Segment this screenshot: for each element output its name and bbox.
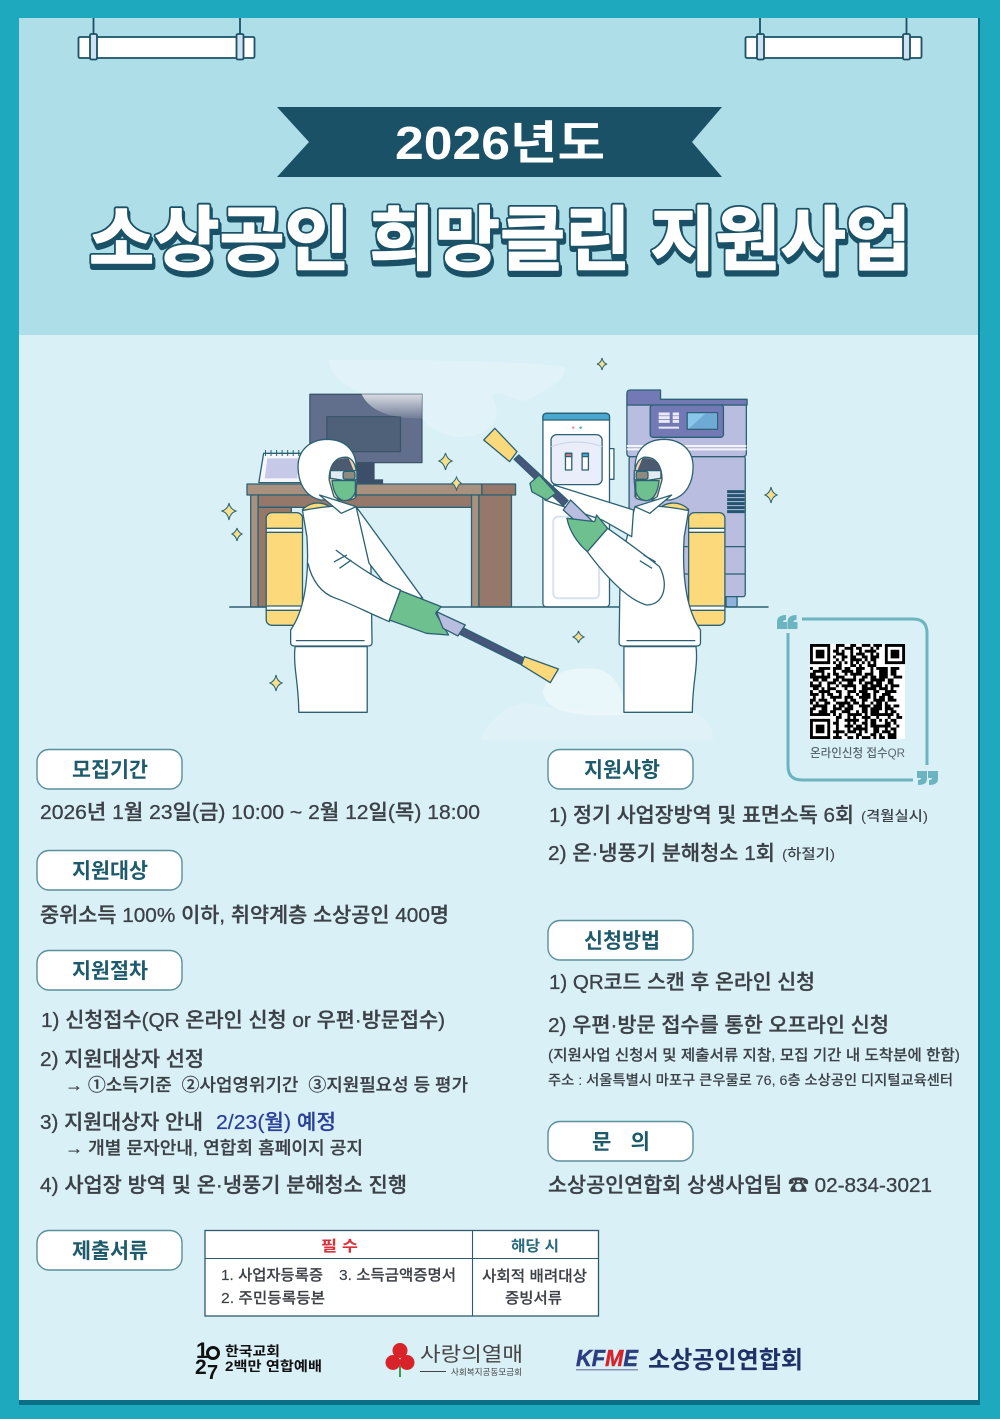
title: 소상공인 희망클린 지원사업 [90, 205, 912, 283]
label: 지원사항 [584, 759, 660, 782]
header panel [19, 18, 978, 335]
section: contact [548, 1122, 932, 1197]
mist clouds [328, 360, 713, 740]
water cooler [543, 413, 614, 607]
support items text: (하절기) [782, 846, 835, 862]
arm [308, 550, 400, 622]
QR code [810, 644, 905, 739]
lower arm [587, 528, 664, 605]
quote mark: open [777, 615, 798, 629]
documents table: 2. 주민등록등본 [221, 1290, 325, 1307]
procedure steps: 3) 지원대상자 안내 [40, 1111, 203, 1134]
documents table: 해당 시 [511, 1238, 559, 1255]
worker: right [484, 428, 725, 712]
target text: 중위소득 100% 이하, 취약계층 소상공인 400명 [40, 904, 449, 927]
QR card [777, 615, 938, 785]
application text: 주소 : 서울특별시 마포구 큰우물로 76, 6층 소상공인 디지털교육센터 [548, 1072, 953, 1088]
sprayer handle [436, 612, 465, 636]
raised arm [545, 485, 634, 537]
suit body [291, 506, 372, 646]
lower glove [567, 515, 608, 552]
support items text: 1) 정기 사업장방역 및 표면소독 6회 [549, 804, 854, 827]
backpack tank [266, 503, 336, 625]
documents table: 필 수 [321, 1238, 358, 1255]
procedure steps: 4) 사업장 방역 및 온·냉풍기 분해청소 진행 [40, 1174, 407, 1197]
sprayer pole [459, 627, 558, 683]
hanger: left [78, 18, 254, 60]
label: 신청방법 [584, 930, 660, 953]
logo: KFME 소상공인연합회 [576, 1345, 803, 1374]
ribbon: year: 2026년도 [395, 117, 605, 169]
application text [548, 971, 960, 1088]
documents table: 3. 소득금액증명서 [339, 1267, 456, 1284]
documents table: 증빙서류 [505, 1290, 562, 1307]
support items text: 2) 온·냉풍기 분해청소 1회 [548, 842, 775, 865]
section: recruitment period [37, 750, 480, 824]
quote mark: close [917, 771, 938, 785]
label [37, 1230, 182, 1270]
desk [247, 484, 516, 607]
label: 지원절차 [72, 960, 148, 983]
support items text: (격월실시) [861, 808, 928, 824]
support items text [548, 804, 928, 865]
upper glove [530, 475, 556, 500]
section: application method [548, 920, 960, 1088]
logo: 1027: 7 [207, 1362, 218, 1384]
procedure steps: 2) 지원대상자 선정 [40, 1048, 204, 1071]
label [548, 920, 693, 960]
glove [389, 591, 449, 635]
section: support items [548, 750, 928, 865]
calendar [259, 450, 302, 483]
documents table: 사회적 배려대상 [482, 1268, 587, 1285]
monitor [310, 394, 422, 484]
copier [627, 390, 747, 607]
hood and face [298, 439, 357, 513]
mirrored body [619, 439, 725, 712]
label [37, 950, 182, 990]
label: 문 의 [592, 1131, 650, 1154]
application text: 2) 우편·방문 접수를 통한 오프라인 신청 [548, 1014, 889, 1037]
section: documents [37, 1230, 598, 1316]
label [548, 1122, 693, 1161]
contact text: 소상공인연합회 상생사업팀 ☎ 02-834-3021 [548, 1174, 932, 1197]
procedure steps: 2/23(월) 예정 [216, 1111, 336, 1134]
ribbon: year [277, 107, 722, 177]
label [548, 750, 693, 789]
logo: 1027: 2백만 연합예배 [225, 1359, 322, 1374]
application text: (지원사업 신청서 및 제출서류 지참, 모집 기간 내 도착분에 한함) [548, 1047, 960, 1064]
QR frame [788, 619, 927, 780]
label [37, 750, 182, 789]
logo: KFME 소상공인연합회: 소상공인연합회 [648, 1347, 803, 1374]
procedure steps [40, 1009, 468, 1197]
logo: 사랑의열매: 사회복지공동모금회 [451, 1367, 522, 1377]
logo: 1027 [195, 1338, 322, 1384]
procedure steps: → ①소득기준 ②사업영위기간 ③지원필요성 등 평가 [65, 1075, 468, 1095]
documents table: 1. 사업자등록증 [221, 1267, 323, 1284]
title: 소상공인 희망클린 지원사업 [89, 201, 911, 279]
floor line [229, 606, 769, 608]
procedure steps: 1) 신청접수(QR 온라인 신청 or 우편·방문접수) [41, 1009, 445, 1032]
application text: 1) QR코드 스캔 후 온라인 신청 [549, 971, 815, 994]
sprayer pole raised [484, 428, 568, 506]
logo: 1027: 1 [196, 1338, 208, 1363]
procedure steps: → 개별 문자안내, 연합회 홈페이지 공지 [65, 1138, 363, 1158]
section: target [37, 850, 449, 927]
logo: 사랑의열매: 사랑의열매 [420, 1343, 523, 1366]
label [37, 850, 182, 890]
logo: 1027: 2 [195, 1356, 207, 1379]
documents table [205, 1230, 598, 1316]
logo: 1027: 한국교회 [225, 1344, 280, 1359]
sprayer handle raised [563, 500, 593, 522]
section: procedure [37, 950, 468, 1197]
worker: left [266, 439, 558, 712]
dates: 2026년 1월 23일(금) 10:00 ~ 2월 12일(목) 18:00 [40, 801, 480, 824]
label: 모집기간 [72, 759, 148, 782]
QR caption: 온라인신청 접수QR [810, 746, 905, 760]
label: 지원대상 [72, 860, 148, 883]
legs [295, 647, 367, 712]
logo: KFME 소상공인연합회: KFME [576, 1345, 639, 1371]
illustration: two workers disinfecting an office [229, 360, 769, 740]
title: 소상공인 희망클린 지원사업 [89, 201, 911, 279]
logo: 사랑의열매 [386, 1343, 523, 1377]
hanger: right [746, 18, 922, 60]
sparkles [222, 358, 777, 691]
label: 제출서류 [72, 1240, 148, 1263]
